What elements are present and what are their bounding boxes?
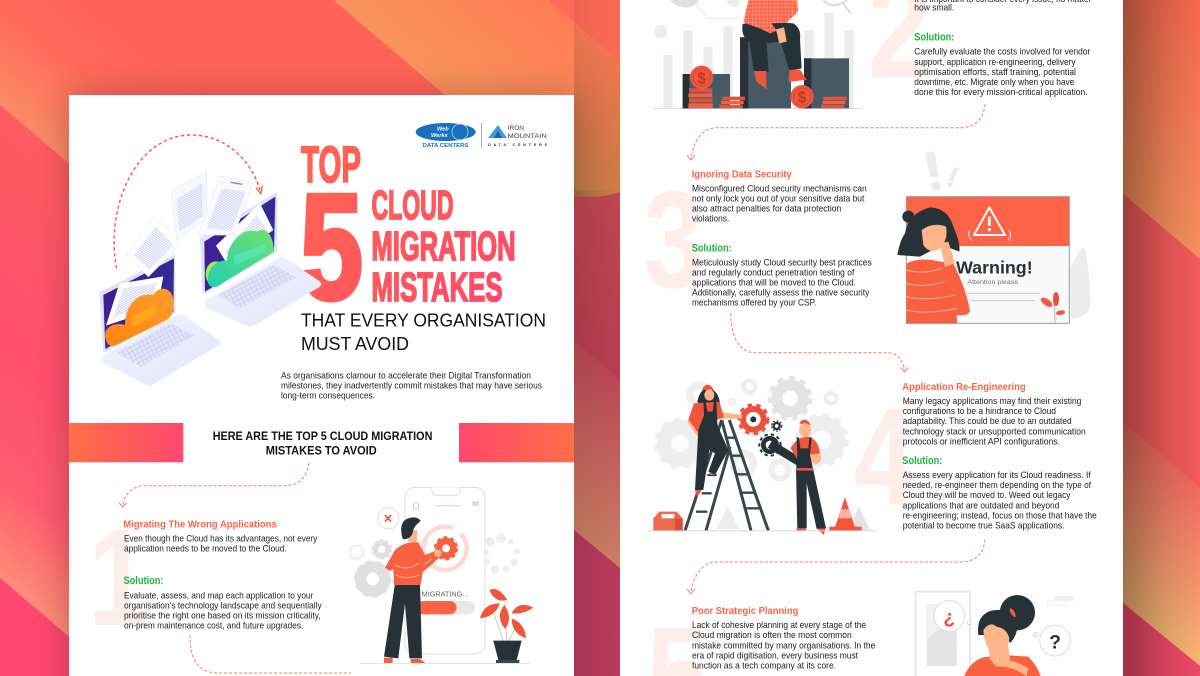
title: MISTAKES	[372, 264, 502, 310]
logo: Web Werks: Werks	[431, 133, 448, 139]
right laptop	[200, 192, 321, 326]
mistake 5 text	[692, 605, 875, 670]
question bubbles: ?	[1049, 632, 1061, 653]
mistake 1 text: Even though the Cloud has its advantages, not every	[124, 534, 318, 544]
mistake 2 text: support, application re-engineering, delivery	[914, 57, 1076, 67]
number 4: 4	[854, 380, 914, 534]
warning window: Attention please	[967, 280, 1019, 286]
title: 5	[300, 162, 363, 330]
mistake 5 text: function as a tech company at its core.	[692, 660, 836, 670]
orange and dark gears	[739, 405, 810, 468]
mistake 4 text: technology stack or unsupported communication	[903, 426, 1086, 436]
subtitle	[301, 310, 546, 354]
mistake 4 text: re-engineering; instead, focus on those that have the	[903, 510, 1097, 520]
illustration: thinking woman with question marks	[916, 592, 1073, 676]
mistake 2 text: done this for every mission-critical application.	[914, 87, 1088, 97]
arrow: mistake 3 to mistake 4	[731, 313, 908, 372]
mistake 4 text: potential to become true SaaS applications.	[903, 520, 1064, 530]
mistake 4 text: protocols or inefficient API configurations.	[903, 436, 1060, 446]
subtitle: MUST AVOID	[301, 333, 409, 354]
banner: section heading	[69, 423, 574, 462]
number 3: 3	[644, 163, 703, 317]
intro text	[281, 371, 542, 401]
intro text: As organisations clamour to accelerate their Digital Transformation	[281, 371, 531, 381]
background chart	[654, 0, 854, 108]
mistake 3 text: applications that will be moved to the Cloud.	[692, 278, 856, 288]
mistake 3 text: Solution:	[692, 242, 732, 254]
subtitle: THAT EVERY ORGANISATION	[301, 310, 546, 331]
exclamation marks	[925, 152, 1090, 319]
woman engineer	[687, 385, 743, 497]
phone	[405, 487, 485, 654]
rotating gear	[423, 527, 467, 570]
illustration: person migrating on phone	[350, 487, 533, 664]
mistake 1 text: organisation’s technology landscape and sequentially	[124, 600, 322, 610]
mistake 3 text: not only lock you out of your sensitive data but	[692, 194, 865, 204]
mistake 3 text: and regularly conduct penetration testing of	[692, 268, 855, 278]
arrow: mistake 2 to mistake 3	[687, 104, 985, 160]
mistake 2 text: Solution:	[914, 32, 954, 44]
warning window	[906, 197, 1069, 323]
mistake 1 text: Solution:	[124, 575, 164, 587]
man engineer	[791, 420, 826, 535]
potted plant	[480, 589, 533, 663]
logos	[416, 123, 547, 149]
person	[384, 517, 442, 663]
panel: right infographic page	[620, 0, 1123, 676]
logo: Web Werks	[416, 123, 476, 149]
title: MIGRATION	[372, 223, 516, 269]
illustration: warning screen with worried woman	[897, 152, 1090, 323]
logo: Web Werks: DATA CENTERS	[422, 143, 469, 149]
mistake 3 text: Additionally, carefully assess the native security	[692, 288, 870, 298]
logo: Iron Mountain: IRON	[508, 125, 524, 132]
title	[300, 136, 516, 330]
question bubbles: ¿	[943, 607, 955, 628]
intro text: long-term consequences.	[281, 391, 375, 401]
mistake 2 text: how small.	[914, 3, 954, 13]
mistake 4 text: Assess every application for its Cloud readiness. If	[903, 470, 1091, 480]
progress bar	[417, 590, 475, 614]
mistake 4 text: needed, re-engineer them depending on the type of	[903, 480, 1091, 490]
mistake 3 text: violations.	[692, 214, 729, 224]
intro text: milestones, they inadvertently commit mistakes that may have serious	[281, 381, 542, 391]
mistake 4 text: configurations to be a hindrance to Cloud	[903, 406, 1056, 416]
dotted arrow	[114, 135, 262, 268]
floating documents	[126, 171, 253, 277]
mistake 3 text: Misconfigured Cloud security mechanisms can	[692, 183, 867, 193]
mistake 5 text: era of rapid digitisation, every business must	[692, 650, 858, 660]
mistake 3 text: also attract penalties for data protection	[692, 204, 841, 214]
mistake 1 text: Evaluate, assess, and map each application to your	[124, 590, 313, 600]
background gears	[656, 378, 847, 479]
arrow: banner to mistake 1	[119, 463, 309, 507]
mistake 5 text: Poor Strategic Planning	[692, 605, 798, 617]
mistake 3 text: Ignoring Data Security	[692, 168, 792, 180]
dark blocks	[683, 37, 849, 108]
mistake 3 text	[692, 168, 872, 308]
door	[916, 592, 1073, 676]
mistake 2 text	[914, 0, 1091, 97]
coins	[688, 66, 847, 108]
mistake 4 text: Application Re-Engineering	[902, 381, 1026, 393]
warning window: Warning!	[956, 257, 1033, 277]
mistake 1 text: application needs to be moved to the Cloud.	[124, 544, 287, 554]
woman	[897, 207, 970, 323]
traffic cones and toolbox	[653, 497, 870, 531]
logo: Iron Mountain: DATA CENTERS	[488, 143, 547, 147]
ladder	[685, 420, 768, 531]
number 1: 1	[88, 501, 149, 655]
mistake 4 text: Solution:	[902, 455, 942, 467]
illustration: person sitting on falling cost bars	[653, 0, 862, 109]
mistake 5 text: Cloud migration is often the most common	[692, 630, 852, 640]
mistake 4 text: adaptability. This could be due to an outdated	[903, 416, 1072, 426]
arrow: mistake 1 to mistake 2	[190, 635, 351, 673]
mistake 2 text: optimisation efforts, staff training, potential	[914, 67, 1076, 77]
banner: section heading: HERE ARE THE TOP 5 CLOUD MIGRATION	[213, 429, 432, 443]
title: TOP	[301, 136, 361, 193]
mistake 1 text: on-prem maintenance cost, and future upgrades.	[124, 620, 303, 630]
speech bubble with X	[378, 508, 399, 529]
mistake 5 text: mistake committed by many organisations. In the	[692, 640, 875, 650]
logo: Iron Mountain: MOUNTAIN	[508, 133, 547, 140]
panel: left infographic page	[69, 95, 574, 676]
left laptop	[99, 254, 220, 385]
banner: section heading: MISTAKES TO AVOID	[266, 443, 377, 457]
mistake 2 text: downtime, etc. Migrate only when you have	[914, 77, 1074, 87]
illustration: engineers fixing gears	[648, 378, 876, 535]
mistake 3 text: Meticulously study Cloud security best practices	[692, 258, 872, 268]
logo: Web Werks: Web	[437, 126, 449, 132]
mistake 1 text	[123, 518, 322, 630]
title: CLOUD	[372, 182, 454, 228]
warning plant	[1039, 292, 1066, 323]
thinking woman	[964, 595, 1041, 676]
question bubbles	[934, 601, 1070, 656]
mistake 1 text: prioritise the right one based on its mission criticality,	[124, 610, 321, 620]
mistake 4 text: Many legacy applications may find their existing	[903, 396, 1081, 406]
mistake 2 text: Carefully evaluate the costs involved for vendor	[914, 47, 1090, 57]
mistake 1 text: Migrating The Wrong Applications	[123, 518, 277, 530]
mistake 5 text: Lack of cohesive planning at every stage of the	[692, 620, 866, 630]
mistake 4 text	[902, 381, 1097, 530]
coins: $	[697, 70, 706, 87]
mistake 3 text: mechanisms offered by your CSP.	[692, 298, 816, 308]
sitting person	[742, 0, 807, 89]
mistake 4 text: applications that are outdated and beyond	[903, 500, 1059, 510]
mistake 4 text: Cloud they will be moved to. Weed out legacy	[903, 490, 1071, 500]
gears and dots	[350, 533, 520, 596]
progress bar: MIGRATING...	[422, 590, 468, 599]
coins: $	[798, 90, 807, 107]
illustration: laptops exchanging documents through the cloud	[99, 135, 321, 385]
arrow: mistake 4 to mistake 5	[687, 540, 985, 594]
logo: Iron Mountain	[488, 125, 547, 147]
